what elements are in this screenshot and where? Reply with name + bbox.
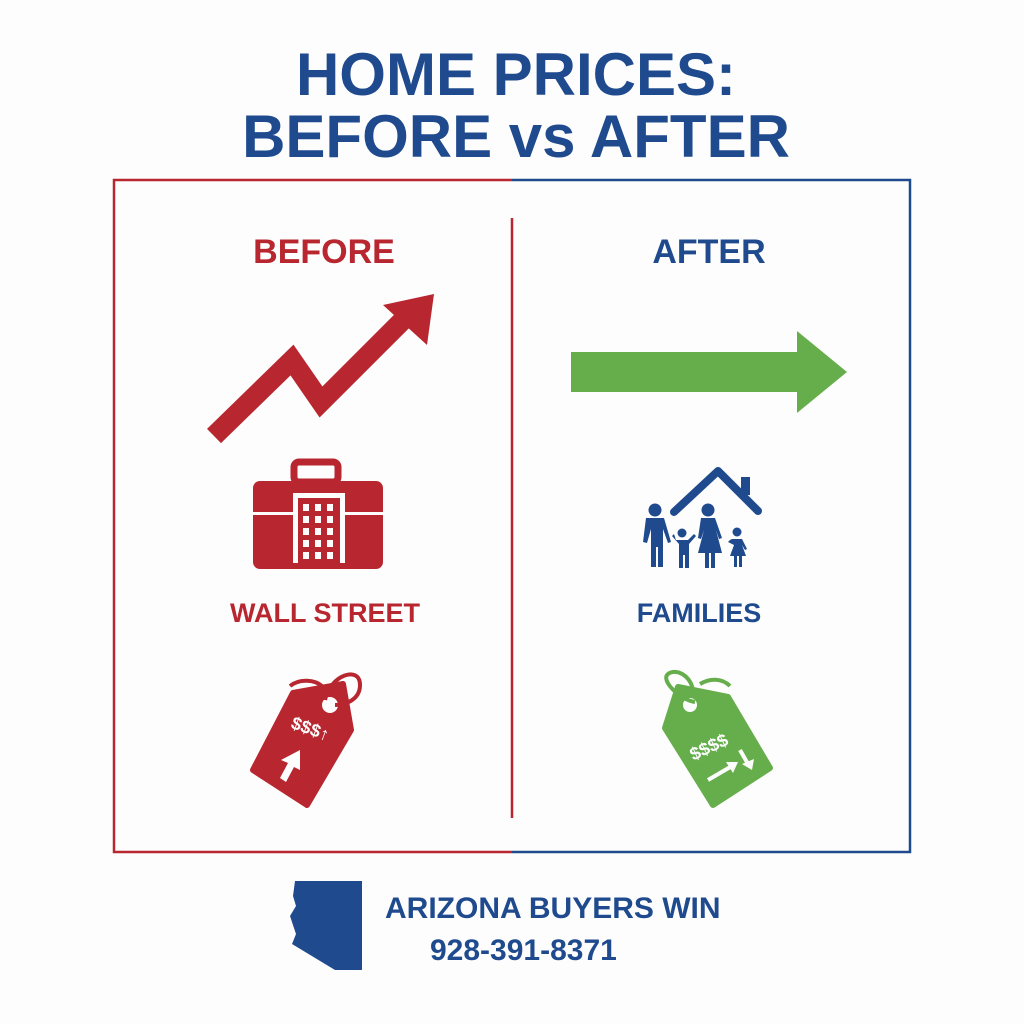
title	[242, 41, 790, 170]
heading: after: AFTER	[652, 233, 766, 271]
footer	[290, 881, 721, 970]
title: HOME PRICES:	[296, 41, 736, 108]
icon: flat green arrow	[571, 331, 847, 413]
panel frame	[114, 180, 910, 852]
icon: briefcase building	[253, 462, 383, 569]
icon: red price tag: $$$↑	[289, 713, 332, 745]
label: families: FAMILIES	[637, 598, 761, 628]
footer text: ARIZONA BUYERS WIN	[385, 892, 721, 925]
icon: family under roof	[643, 471, 758, 568]
icon: arizona map	[290, 881, 362, 970]
icon: green price tag	[665, 672, 770, 805]
icon: green price tag: $$$$	[687, 730, 731, 765]
panel: after	[571, 233, 847, 805]
label: wall street: WALL STREET	[230, 598, 421, 628]
phone number: 928-391-8371	[430, 934, 617, 967]
icon: red price tag	[253, 674, 360, 805]
title: BEFORE vs AFTER	[242, 103, 790, 170]
heading: before: BEFORE	[253, 233, 395, 271]
panel: before	[214, 233, 434, 805]
icon: rising arrow	[214, 294, 434, 436]
